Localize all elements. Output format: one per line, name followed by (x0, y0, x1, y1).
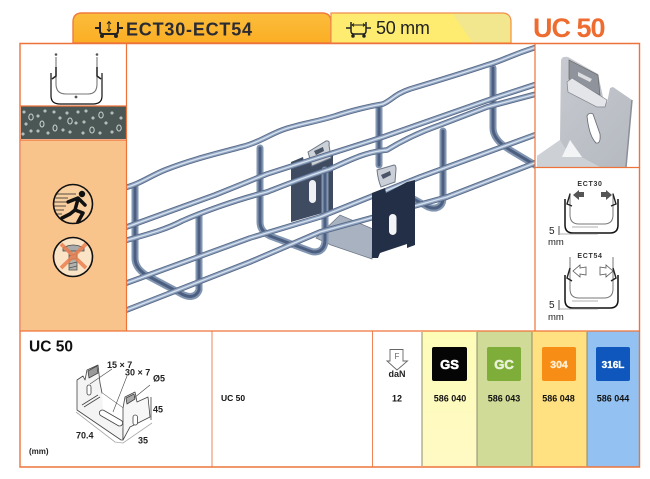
cell: GS background (422, 331, 477, 467)
text: unit: (mm) (29, 447, 49, 456)
back bracket (291, 141, 333, 222)
dimension: slot 30 x 7: 30 × 7 (125, 368, 150, 378)
badge: 316L: 316L (602, 360, 624, 371)
panel: mounting diagram (20, 43, 126, 106)
icon: load arrow (387, 350, 408, 370)
dimension: hole diameter: Ø5 (153, 374, 165, 384)
header tab: tray range (73, 13, 331, 43)
heading: model: UC 50 (29, 338, 73, 356)
text: 316L reference: 586 044 (597, 394, 629, 404)
text: load value: 12 (392, 394, 402, 404)
cell: GC background (477, 331, 532, 467)
label: ECT30: ECT30 (577, 181, 603, 188)
icon: tray fixed on concrete (51, 53, 102, 104)
photo: bracket close-up (537, 57, 632, 167)
text: 304 reference: 586 048 (542, 394, 575, 404)
title: UC 50 (533, 13, 605, 43)
dimension: ECT54 offset: 5 (549, 300, 555, 311)
label: ECT54: ECT54 (577, 253, 603, 260)
dimension: slot 15 x 7: 15 × 7 (107, 360, 132, 370)
cell: 304 background (532, 331, 587, 467)
icon: tray width (346, 22, 371, 37)
dimension unit: ECT30: mm (548, 237, 564, 248)
badge: 304: 304 (550, 359, 568, 371)
icon: no screws (54, 238, 92, 276)
header tab: width (331, 13, 511, 43)
photo: wire mesh tray with brackets (124, 46, 540, 311)
text: model name: UC 50 (221, 393, 245, 403)
panel: concrete texture (21, 106, 126, 139)
text: width value: 50 mm (376, 18, 430, 38)
icon: load arrow: F (395, 352, 400, 361)
badge: GC: GC (494, 357, 514, 372)
diagram: ECT30 (559, 190, 618, 235)
table row: product references (212, 331, 639, 467)
icon: tray height (95, 22, 123, 37)
text: load unit: daN (388, 369, 406, 379)
badge: GS: GS (440, 357, 459, 372)
icon: quick installation (54, 184, 92, 224)
panel: dimensions (29, 338, 165, 456)
badge: GC (487, 347, 521, 381)
text: GS reference: 586 040 (434, 394, 466, 404)
panel: ECT30 and ECT54 fitting (548, 181, 618, 323)
panel: warnings (21, 140, 126, 331)
badge: 304 (542, 347, 576, 381)
badge: GS (432, 347, 467, 381)
heading: compatible trays: ECT30-ECT54 (126, 20, 253, 40)
mesh wires back (124, 46, 540, 311)
text: GC reference: 586 043 (488, 394, 520, 404)
diagram: ECT54 (559, 257, 618, 310)
front bracket (372, 165, 415, 258)
dimension: length: 70.4 (76, 430, 94, 440)
bracket base (316, 215, 373, 259)
dimension: ECT30 offset: 5 (549, 226, 555, 237)
dimension: depth: 35 (138, 436, 148, 446)
drawing: bracket dimensions (76, 365, 152, 443)
dimension: height: 45 (153, 404, 163, 414)
badge: 316L (596, 347, 630, 381)
cell: 316L background (587, 331, 639, 467)
dimension unit: ECT54: mm (548, 312, 564, 323)
